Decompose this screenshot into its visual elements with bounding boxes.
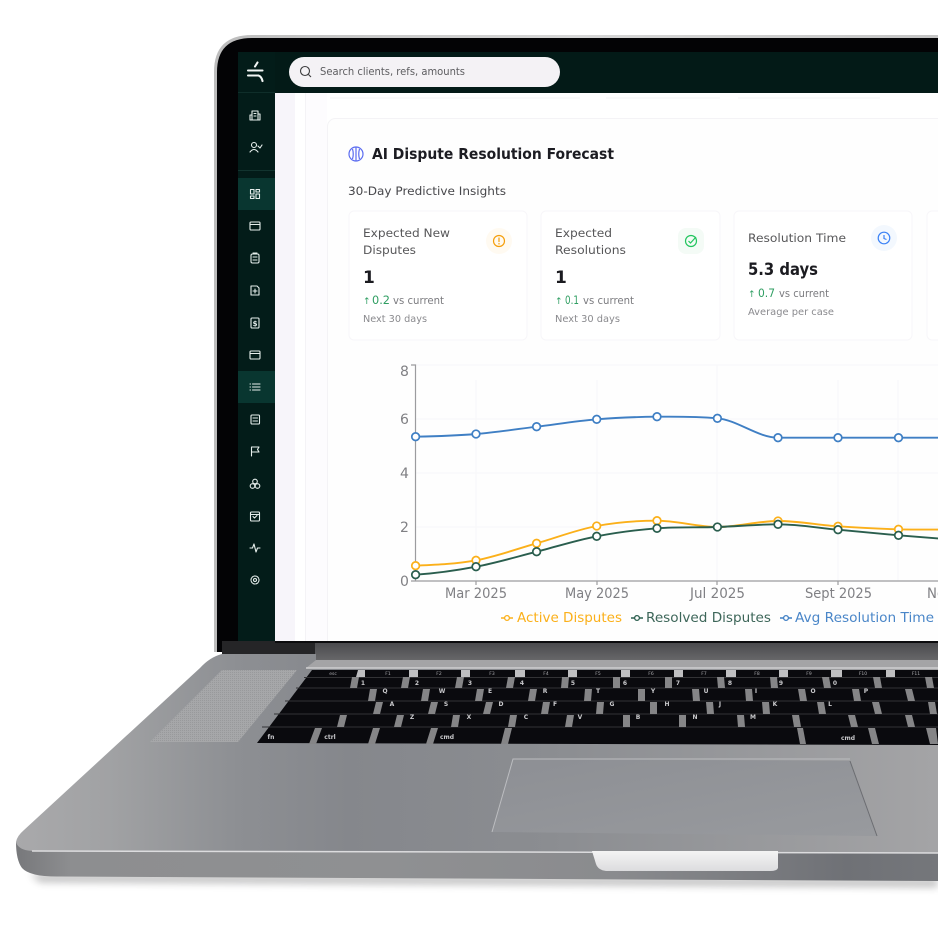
key labels: F9 xyxy=(806,671,812,677)
key labels: 2 xyxy=(415,680,419,687)
icon: user check xyxy=(250,142,262,152)
key labels: cmd xyxy=(440,734,454,741)
laptop drop shadow xyxy=(30,874,938,887)
speaker grille xyxy=(150,670,297,742)
icon: check xyxy=(678,228,704,254)
icon: dollar: $ xyxy=(253,320,258,328)
sidebar active item: list xyxy=(238,371,275,403)
key labels: F5 xyxy=(595,671,601,677)
key labels: J xyxy=(718,701,721,708)
key labels: 7 xyxy=(676,680,680,687)
series: resolved disputes xyxy=(412,520,938,578)
card: expected resolutions: Expected xyxy=(555,226,612,240)
icon: file plus xyxy=(251,286,259,295)
function row gaps xyxy=(356,670,895,677)
icon: wallet xyxy=(250,351,260,359)
key labels: 5 xyxy=(571,680,575,687)
hinge xyxy=(222,641,938,662)
line chart: 6 xyxy=(400,412,409,428)
card: expected new disputes: Next 30 days xyxy=(363,314,427,325)
card: resolution time xyxy=(748,225,897,317)
key labels: 9 xyxy=(779,680,783,687)
card: expected new disputes: Expected New xyxy=(363,226,450,240)
series: active disputes xyxy=(412,517,938,570)
card: resolution time: ↑ xyxy=(748,290,756,300)
key labels: K xyxy=(773,701,778,708)
card: expected resolutions: ↑ xyxy=(555,297,563,307)
card: resolution time: vs current xyxy=(779,288,829,300)
card: resolution time: 5.3 days xyxy=(748,260,818,280)
laptop front edge xyxy=(16,842,938,881)
key labels: F8 xyxy=(754,671,760,677)
line chart: 4 xyxy=(400,466,409,482)
legend xyxy=(501,612,934,625)
key labels: 1 xyxy=(361,680,365,687)
card: fourth card edge xyxy=(927,211,938,340)
card: expected resolutions: vs current xyxy=(583,295,634,307)
key labels: Q xyxy=(382,688,388,695)
key labels: F2 xyxy=(436,671,442,677)
opening notch xyxy=(592,851,778,871)
trackpad xyxy=(492,759,877,836)
key labels: Y xyxy=(650,688,656,695)
card: expected new disputes: ↑ xyxy=(363,297,371,307)
key labels: G xyxy=(610,701,615,708)
icon: building xyxy=(250,111,260,120)
card: expected new disputes: 1 xyxy=(363,268,375,288)
key labels: V xyxy=(578,714,583,721)
icon: calendar check xyxy=(250,512,260,521)
key labels: B xyxy=(636,714,641,721)
key labels: D xyxy=(499,701,504,708)
key labels: S xyxy=(444,701,448,708)
card: expected resolutions: 0.1 xyxy=(565,293,579,307)
icon: dashboard xyxy=(250,190,260,198)
card: expected new disputes: Disputes xyxy=(363,243,416,257)
card: resolution time: 0.7 xyxy=(758,286,775,300)
line chart: 2 xyxy=(400,520,409,536)
card: expected new disputes: vs current xyxy=(393,295,444,307)
key labels: F11 xyxy=(912,671,920,677)
card: expected new disputes xyxy=(364,228,512,324)
icon: settings xyxy=(251,576,259,584)
line chart: Jul 2025 xyxy=(689,586,745,602)
key labels: 3 xyxy=(468,680,472,687)
key labels: F7 xyxy=(701,671,707,677)
card: resolution time: Average per case xyxy=(748,307,834,318)
search box xyxy=(289,57,560,87)
key labels: cmd xyxy=(841,735,855,742)
key labels: F10 xyxy=(859,671,867,677)
card: expected resolutions: Resolutions xyxy=(555,243,626,257)
card: expected resolutions: Next 30 days xyxy=(555,314,620,325)
key labels: F xyxy=(553,701,557,708)
hinge highlight xyxy=(306,660,938,668)
legend: Resolved Disputes xyxy=(646,610,771,626)
key labels: O xyxy=(810,688,816,695)
icon: dollar xyxy=(251,318,259,328)
key labels: T xyxy=(596,688,601,695)
line chart: Sept 2025 xyxy=(805,586,872,602)
key labels: C xyxy=(524,714,529,721)
search box: Search clients, refs, amounts xyxy=(320,66,465,78)
icon: list xyxy=(250,384,260,390)
icon: logo xyxy=(248,62,262,81)
icon: activity xyxy=(250,544,260,552)
key labels: R xyxy=(543,688,548,695)
key labels: F6 xyxy=(648,671,654,677)
icon: flag xyxy=(252,447,259,456)
icon: brain xyxy=(349,147,363,161)
key labels: F4 xyxy=(543,671,549,677)
icon: clock xyxy=(871,225,897,251)
key labels: P xyxy=(864,688,869,695)
laptop base top surface xyxy=(16,654,938,856)
key labels: X xyxy=(467,714,472,721)
keyboard xyxy=(257,668,938,745)
key separators xyxy=(309,677,938,744)
card: expected resolutions: 1 xyxy=(555,268,567,288)
line chart: Mar 2025 xyxy=(445,586,507,602)
key labels: 0 xyxy=(833,680,837,687)
card: expected resolutions xyxy=(556,228,704,324)
key row edges xyxy=(262,678,938,727)
line chart: 8 xyxy=(400,364,409,380)
key labels: F3 xyxy=(489,671,495,677)
top bar xyxy=(238,52,938,93)
key labels: 8 xyxy=(728,680,732,687)
key labels: 4 xyxy=(520,680,524,687)
line chart: May 2025 xyxy=(565,586,629,602)
key labels xyxy=(268,671,920,742)
heading: AI Dispute Resolution Forecast xyxy=(372,145,614,163)
icon: alert xyxy=(486,228,512,254)
key labels: W xyxy=(439,688,446,695)
sidebar active item: dashboard xyxy=(238,178,275,210)
icon: clipboard xyxy=(251,253,259,263)
key labels: F1 xyxy=(385,671,391,677)
sidebar xyxy=(238,52,275,641)
key labels: N xyxy=(692,714,698,721)
panel: AI dispute forecast xyxy=(327,118,938,641)
icon: calculator xyxy=(251,415,260,424)
icon: card xyxy=(250,222,260,230)
key labels: E xyxy=(488,688,492,695)
legend: Avg Resolution Time xyxy=(795,610,934,626)
series: avg resolution time xyxy=(412,413,938,442)
laptop lid xyxy=(214,35,938,652)
key labels: fn xyxy=(268,734,274,741)
key labels: M xyxy=(750,714,756,721)
key labels: U xyxy=(704,688,709,695)
legend: Active Disputes xyxy=(517,610,622,626)
subheading: 30-Day Predictive Insights xyxy=(348,184,506,198)
key labels: 6 xyxy=(623,680,627,687)
key labels: A xyxy=(390,701,395,708)
card: resolution time: Resolution Time xyxy=(748,231,846,245)
key labels: esc xyxy=(329,672,337,677)
key labels: H xyxy=(664,701,670,708)
key labels: L xyxy=(828,701,832,708)
line chart: 0 xyxy=(400,574,409,590)
card: expected new disputes: 0.2 xyxy=(372,293,390,307)
icon: cluster xyxy=(250,479,260,488)
key labels: Z xyxy=(410,714,415,721)
laptop screen xyxy=(238,52,938,641)
key labels: I xyxy=(755,688,757,695)
line chart xyxy=(400,364,938,626)
key labels: ctrl xyxy=(324,734,336,741)
